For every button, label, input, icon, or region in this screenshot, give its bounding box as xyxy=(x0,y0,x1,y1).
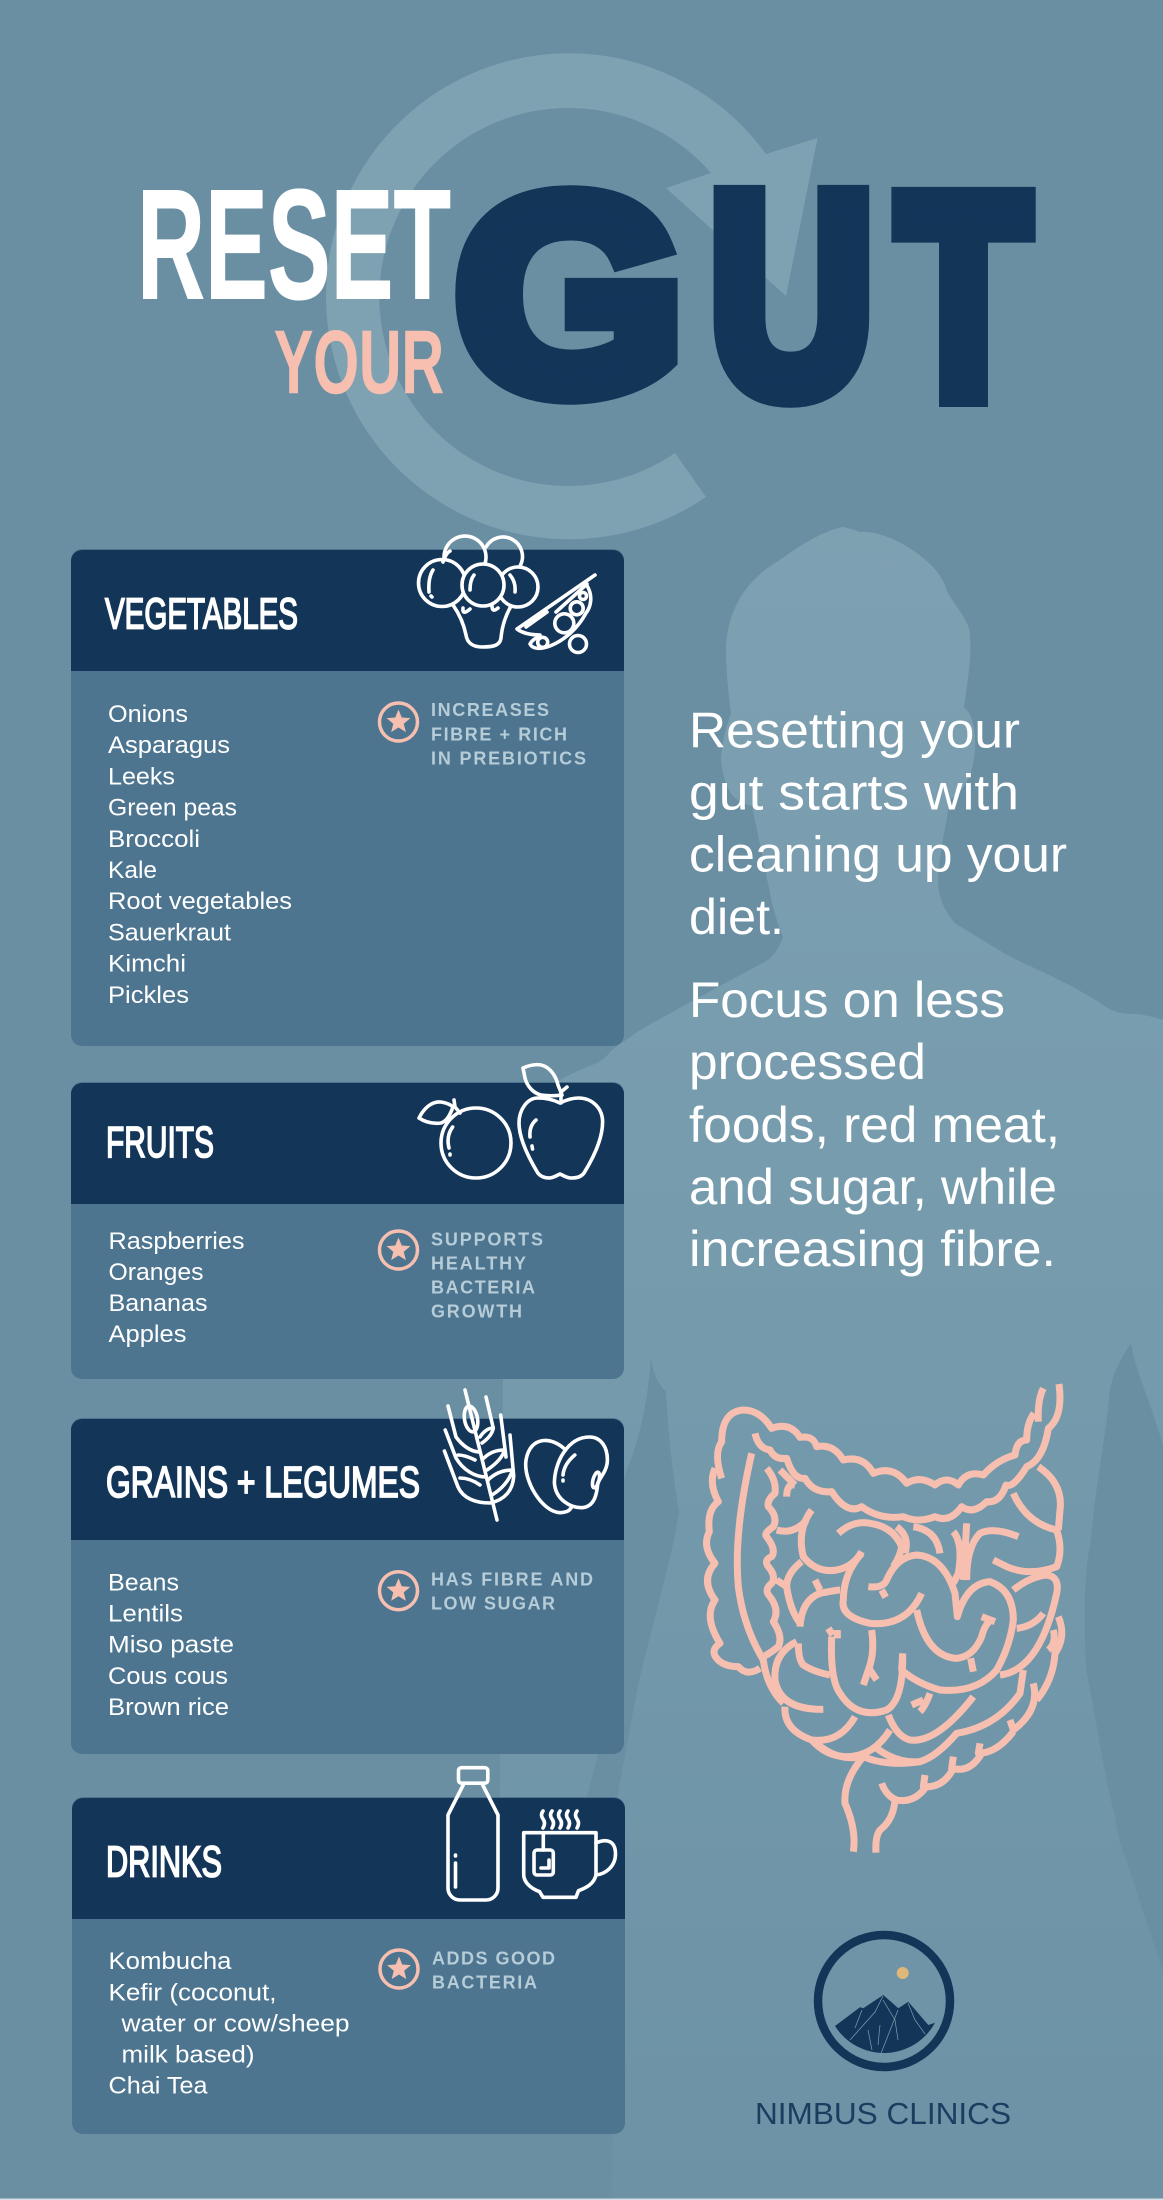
intro text: cleaning up your xyxy=(689,827,1067,883)
grains note: LOW SUGAR xyxy=(431,1594,555,1614)
title word: GUT: G xyxy=(456,141,683,449)
fruits list xyxy=(108,1228,244,1348)
panel: drinks xyxy=(72,1768,625,2134)
vegetables header bar xyxy=(71,550,624,671)
vegetables list: Kimchi xyxy=(108,951,186,978)
intro text: increasing fibre. xyxy=(689,1221,1056,1277)
icon: orange xyxy=(419,1100,511,1178)
panel: grains and legumes xyxy=(71,1390,624,1754)
fruits note: GROWTH xyxy=(431,1302,522,1322)
grains list: Brown rice xyxy=(108,1694,229,1721)
icon: bottle xyxy=(448,1768,498,1900)
drinks list: Kefir (coconut, xyxy=(108,1980,276,2007)
logo ring xyxy=(818,1935,950,2067)
title word: RESET: RESET xyxy=(137,158,451,332)
icon: apple xyxy=(519,1065,603,1178)
drinks list: water or cow/sheep xyxy=(120,2011,350,2038)
fruits note: SUPPORTS xyxy=(431,1230,543,1250)
vegetables list: Root vegetables xyxy=(108,888,292,915)
grains list: Lentils xyxy=(108,1601,183,1628)
fruits note xyxy=(431,1230,543,1322)
vegetables note: INCREASES xyxy=(431,700,549,720)
fruits note: HEALTHY xyxy=(431,1254,526,1274)
icon: wheat xyxy=(444,1390,514,1520)
intro text: gut starts with xyxy=(689,764,1019,820)
logo wordmark: NIMBUS CLINICS xyxy=(755,2096,1011,2131)
vegetables list: Kale xyxy=(108,857,157,884)
drinks list: Chai Tea xyxy=(108,2073,208,2100)
vegetables note: FIBRE + RICH xyxy=(431,724,567,744)
fruits note: BACTERIA xyxy=(431,1278,535,1298)
vegetables note: IN PREBIOTICS xyxy=(431,748,586,768)
drinks note: BACTERIA xyxy=(432,1972,537,1992)
icon: pea pod xyxy=(517,575,595,652)
star badge xyxy=(380,1231,418,1269)
vegetables list: Green peas xyxy=(108,795,237,822)
intro text: diet. xyxy=(689,889,784,945)
intro text: foods, red meat, xyxy=(689,1097,1060,1153)
vegetables list: Sauerkraut xyxy=(108,919,231,946)
body silhouette xyxy=(480,527,1163,2200)
vegetables list: Leeks xyxy=(108,763,175,790)
intro text: Resetting your xyxy=(689,703,1020,759)
panel: fruits xyxy=(71,1065,624,1379)
mountain veins xyxy=(850,1996,925,2056)
title word: GUT: U xyxy=(710,136,874,454)
vegetables note xyxy=(431,700,586,768)
intro text: processed xyxy=(689,1034,926,1090)
title xyxy=(137,136,1029,456)
fruits heading: FRUITS xyxy=(106,1118,214,1167)
fruits header bar xyxy=(71,1083,624,1204)
intro text xyxy=(689,703,1067,1277)
logo: Nimbus Clinics xyxy=(755,1935,1011,2131)
vegetables list: Asparagus xyxy=(108,732,230,759)
logo mountain xyxy=(835,1995,935,2053)
fruits list: Raspberries xyxy=(108,1228,244,1255)
vegetables list xyxy=(108,701,292,1009)
grains list: Miso paste xyxy=(108,1632,234,1659)
drinks list xyxy=(108,1948,350,2100)
star badge xyxy=(380,1572,418,1610)
vegetables list: Broccoli xyxy=(108,826,200,853)
bottom edge line xyxy=(0,2198,1163,2200)
title word: YOUR: YOUR xyxy=(274,313,444,413)
icon: tea cup xyxy=(524,1811,616,1897)
intro text: Focus on less xyxy=(689,972,1005,1028)
title word: GUT: T xyxy=(898,138,1029,456)
grains note xyxy=(431,1570,593,1614)
icon: broccoli xyxy=(418,536,538,647)
icon: beans xyxy=(526,1437,607,1513)
grains list xyxy=(108,1570,234,1721)
fruits list: Bananas xyxy=(108,1290,208,1317)
vegetables list: Pickles xyxy=(108,982,189,1009)
grains heading: GRAINS + LEGUMES xyxy=(106,1458,420,1507)
fruits list: Apples xyxy=(108,1321,186,1348)
drinks note xyxy=(432,1948,555,1992)
drinks list: Kombucha xyxy=(108,1948,232,1975)
grains list: Beans xyxy=(108,1570,179,1597)
grains list: Cous cous xyxy=(108,1663,228,1690)
intro text: and sugar, while xyxy=(689,1159,1057,1215)
icon: intestines xyxy=(707,1384,1062,1853)
drinks list: milk based) xyxy=(122,2042,254,2069)
drinks header bar xyxy=(72,1798,625,1919)
vegetables heading: VEGETABLES xyxy=(105,590,298,638)
grains header bar xyxy=(71,1419,624,1540)
logo sun xyxy=(897,1967,909,1979)
vegetables list: Onions xyxy=(108,701,188,728)
grains note: HAS FIBRE AND xyxy=(431,1570,593,1590)
star badge xyxy=(380,1950,418,1988)
circular arrow xyxy=(326,53,818,539)
star badge xyxy=(380,703,418,741)
drinks heading: DRINKS xyxy=(106,1838,222,1887)
fruits list: Oranges xyxy=(108,1259,204,1286)
drinks note: ADDS GOOD xyxy=(432,1948,555,1968)
panel: vegetables xyxy=(71,536,624,1046)
